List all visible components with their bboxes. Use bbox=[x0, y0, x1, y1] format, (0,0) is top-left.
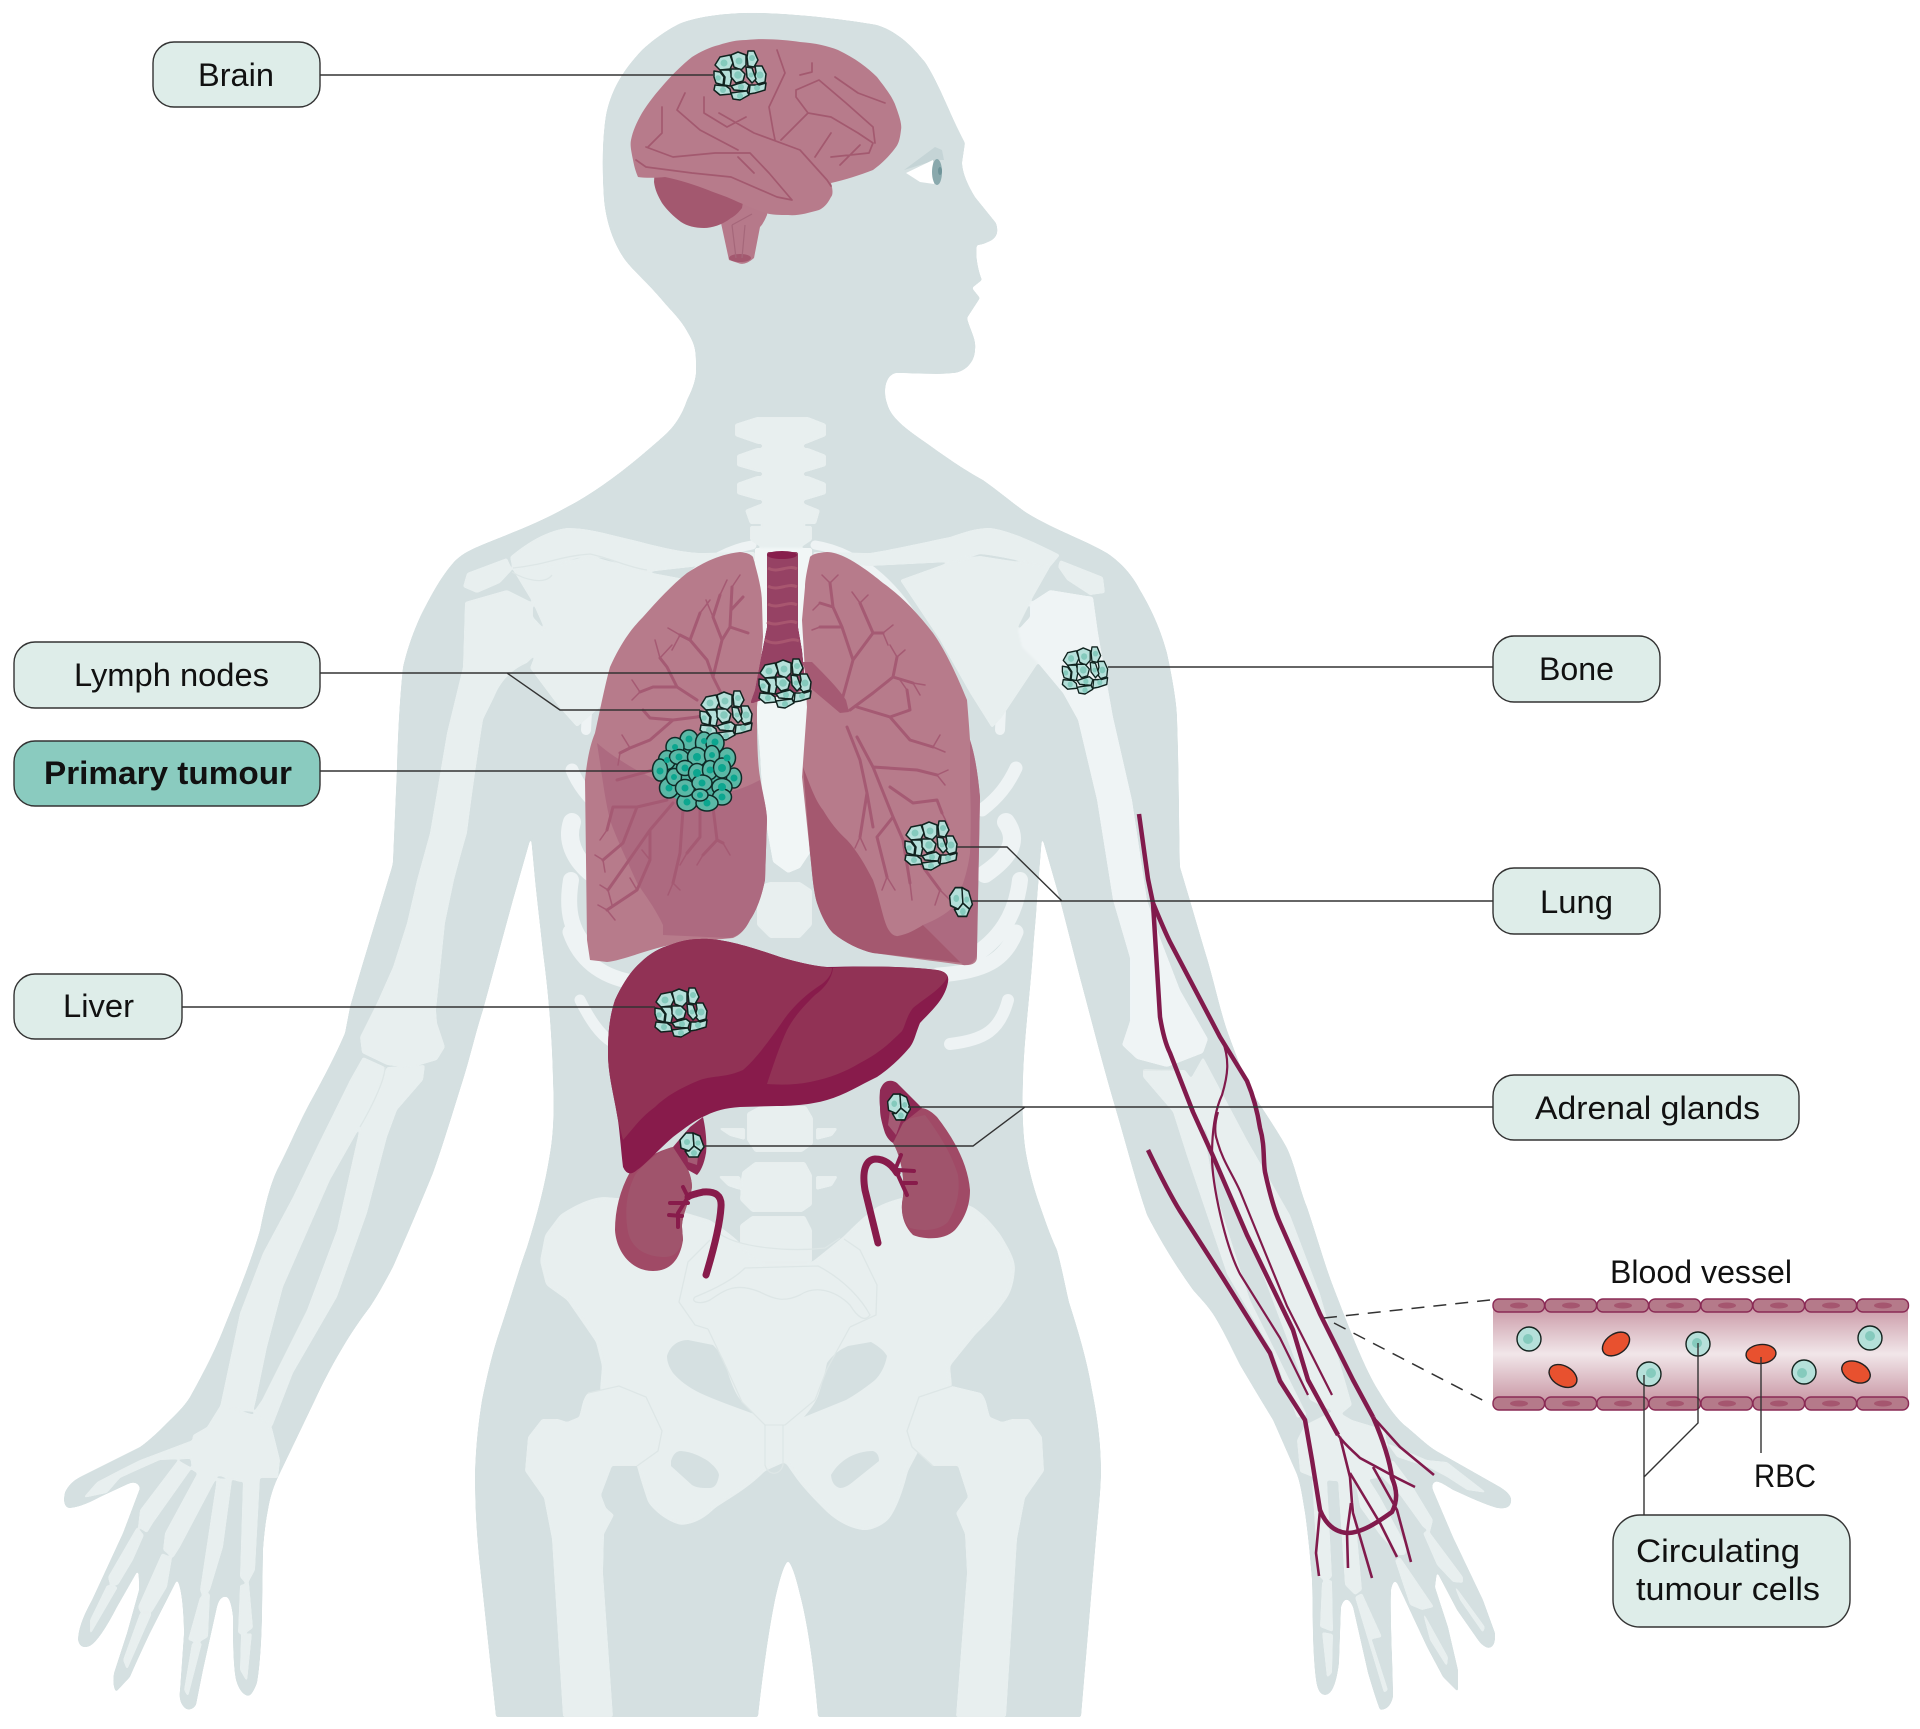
dashed zoom lines to blood vessel bbox=[1324, 1300, 1490, 1404]
label: Lung bbox=[1493, 868, 1660, 934]
tumour cluster: adrenal right bbox=[888, 1094, 910, 1120]
label: Adrenal glands bbox=[1493, 1075, 1799, 1140]
right lung: upper lobe bbox=[802, 552, 980, 965]
left lung bbox=[585, 552, 767, 962]
skeleton: forearm and hand bones, left bbox=[83, 1057, 425, 1697]
label: Primary tumour: Primary tumour bbox=[44, 755, 292, 791]
veins in the arm bbox=[1139, 814, 1434, 1578]
vessel wall cells, top bbox=[1493, 1299, 1908, 1312]
label: Brain bbox=[153, 42, 320, 107]
renal arteries bbox=[669, 1155, 916, 1275]
label: Circulating tumour cells: Circulating bbox=[1636, 1533, 1800, 1569]
right lung: lower dark patch bbox=[803, 767, 963, 963]
body silhouette bbox=[64, 13, 1511, 1717]
vessel lumen bbox=[1493, 1308, 1908, 1400]
tumour cluster: adrenal left bbox=[680, 1133, 704, 1157]
brain bbox=[631, 39, 901, 264]
label: Lung: Lung bbox=[1540, 884, 1613, 920]
skeleton: faint bone outlines bbox=[360, 554, 1175, 1473]
eye bbox=[904, 147, 944, 185]
leader lines bbox=[182, 75, 1493, 1146]
tumour cluster: brain bbox=[714, 51, 766, 100]
skeleton: ribs bbox=[569, 545, 1020, 1044]
circulating tumour cells bbox=[1517, 1326, 1882, 1386]
red blood cells bbox=[1545, 1327, 1874, 1392]
vessel wall nuclei bbox=[1510, 1302, 1892, 1406]
liver bbox=[608, 939, 948, 1173]
brain folds bbox=[636, 50, 885, 200]
trachea bbox=[750, 551, 806, 704]
vessel wall cells, bottom bbox=[1493, 1397, 1908, 1410]
label: Primary tumour bbox=[14, 741, 320, 806]
label: Circulating tumour cells: tumour cells bbox=[1636, 1571, 1820, 1607]
skeleton: clavicles, scapulae and humeri bbox=[360, 528, 1208, 1068]
tumour cluster: lymph node, central bbox=[759, 659, 811, 708]
brainstem bbox=[721, 190, 770, 264]
tumour cluster: lymph node, hilar bbox=[700, 691, 752, 740]
leader lines: vessel contents bbox=[1644, 1343, 1761, 1515]
label: Brain: Brain bbox=[198, 57, 274, 93]
skeleton: pelvis bbox=[525, 1195, 1044, 1717]
skeleton: spine and sternum bbox=[718, 417, 838, 1262]
label: Liver: Liver bbox=[63, 988, 134, 1024]
label: Circulating tumour cells bbox=[1613, 1515, 1850, 1627]
left lung: upper lobe bbox=[585, 552, 767, 962]
tumour cluster: lung metastasis large bbox=[905, 821, 957, 870]
label: Adrenal glands: Adrenal glands bbox=[1535, 1090, 1760, 1126]
tumour cluster: bone bbox=[1062, 647, 1108, 694]
liver: right lobe bbox=[767, 967, 947, 1085]
tumour cluster: liver bbox=[655, 988, 707, 1037]
skeleton: forearm and hand bones, right bbox=[1143, 1057, 1487, 1693]
liver: left lobe bbox=[608, 939, 832, 1140]
cerebrum bbox=[631, 39, 901, 215]
label: Lymph nodes bbox=[14, 642, 320, 708]
kidneys bbox=[615, 1108, 970, 1271]
adrenal glands bbox=[673, 1081, 922, 1175]
bronchial trees bbox=[595, 575, 950, 920]
tumour cluster: lung metastasis small bbox=[950, 888, 972, 916]
label: RBC: RBC bbox=[1754, 1458, 1816, 1494]
label: Blood vessel: Blood vessel bbox=[1610, 1254, 1792, 1290]
blood vessel panel bbox=[1493, 1299, 1908, 1410]
cerebellum bbox=[654, 165, 745, 228]
label: Bone bbox=[1493, 636, 1660, 702]
label: Lymph nodes: Lymph nodes bbox=[74, 657, 269, 693]
right lung: outer dark band bbox=[923, 740, 980, 965]
right lung bbox=[802, 552, 980, 965]
label: Bone: Bone bbox=[1539, 651, 1614, 687]
primary tumour bbox=[652, 730, 742, 811]
left lung: lower lobe bbox=[597, 743, 767, 938]
label: Liver bbox=[14, 974, 182, 1039]
